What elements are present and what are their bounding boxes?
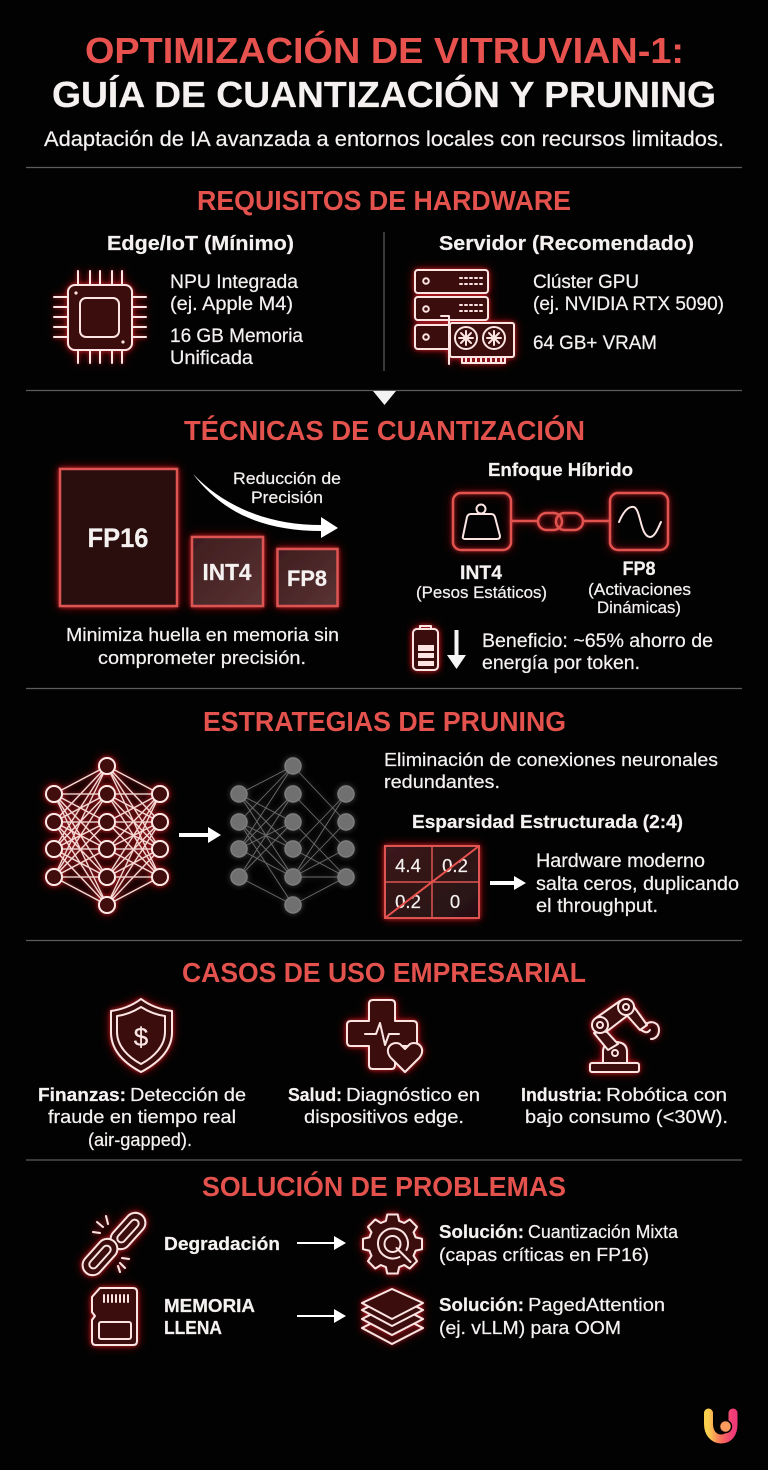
text: finanzas: Detección de (130, 1084, 246, 1105)
text: server specs: (ej. NVIDIA RTX 5090) (533, 294, 724, 315)
text: edge specs: NPU Integrada (170, 272, 298, 293)
label: memoria llena: LLENA (164, 1317, 222, 1338)
text: edge specs: (ej. Apple M4) (170, 294, 293, 315)
icon: health (347, 1000, 422, 1072)
heading: requisitos de hardware: REQUISITOS DE HARDWARE (197, 185, 571, 216)
panel: estrategias de pruning (46, 706, 739, 918)
text: finanzas: fraude en tiempo real (48, 1106, 236, 1127)
panel: solucion de problemas (79, 1171, 679, 1345)
text: server specs: Clúster GPU (533, 272, 639, 293)
panel: requisitos de hardware (54, 185, 724, 371)
icon: weight (463, 504, 500, 539)
arrow: precision reduction (193, 474, 338, 538)
chart: sparsity grid: 0.2 (442, 855, 468, 876)
heading: tecnicas: TÉCNICAS DE CUANTIZACIÓN (184, 415, 585, 446)
icon: shield (111, 999, 172, 1072)
diagram: hybrid link (453, 493, 668, 550)
label: fp8 (588, 558, 691, 617)
label: degradacion: Degradación (164, 1233, 280, 1254)
text: salud (288, 1084, 480, 1127)
arrow: degradacion (297, 1236, 346, 1250)
icon: server and gpu (415, 270, 514, 364)
chart: sparsity grid: 0 (450, 891, 460, 912)
icon: logo (708, 1413, 733, 1439)
label: fp8: (Activaciones (588, 581, 691, 599)
text: industria (521, 1084, 728, 1127)
text: memory footprint: comprometer precisión. (98, 647, 306, 668)
heading: casos de uso: CASOS DE USO EMPRESARIAL (182, 957, 586, 988)
panel: tecnicas de cuantizacion (60, 415, 713, 674)
text: solucion mixta: (capas críticas en FP16) (439, 1245, 649, 1265)
chart: sparsity grid (385, 846, 479, 918)
block: INT4: INT4 (202, 559, 252, 585)
text: finanzas: Finanzas: (38, 1084, 126, 1105)
heading: solucion: SOLUCIÓN DE PROBLEMAS (202, 1171, 566, 1202)
text: salud: dispositivos edge. (304, 1106, 464, 1127)
label: reduccion de precision: Reducción de (233, 469, 341, 488)
text: memory footprint (66, 624, 339, 668)
text: solucion mixta: Solución: (439, 1222, 524, 1242)
subtitle: Adaptación de IA avanzada a entornos locales con recursos limitados. (44, 128, 724, 151)
block: FP8: FP8 (287, 566, 327, 591)
text: finanzas: (air-gapped). (88, 1129, 192, 1150)
text: benefit: energía por token. (482, 653, 640, 674)
text: server specs (533, 272, 724, 354)
icon: gear (363, 1214, 422, 1274)
text: salud: Diagnóstico en (346, 1084, 480, 1105)
icon: sd card (92, 1288, 137, 1345)
chart: sparsity grid: 0.2 (395, 891, 421, 912)
label: int4: (Pesos Estáticos) (416, 584, 547, 602)
chart: pruned network (231, 758, 354, 913)
arrow: sparsity (490, 876, 526, 890)
block: FP8 (278, 549, 338, 606)
icon: chip (54, 271, 146, 363)
heading: edge: Edge/IoT (Mínimo) (107, 233, 294, 255)
text: edge specs: 16 GB Memoria (170, 326, 303, 347)
title: GUÍA DE CUANTIZACIÓN Y PRUNING (52, 73, 716, 115)
text: industria: Industria: (521, 1084, 602, 1105)
text: benefit (482, 631, 713, 674)
icon: broken chain (79, 1209, 149, 1279)
block: FP16 (60, 469, 177, 606)
text: memory footprint: Minimiza huella en memoria sin (66, 624, 339, 645)
text: pruning description: redundantes. (384, 771, 500, 792)
arrow: pruned (179, 827, 221, 843)
text: solucion mixta: Cuantización Mixta (528, 1222, 679, 1242)
text: edge specs: Unificada (170, 348, 253, 369)
label: int4: INT4 (460, 562, 502, 584)
chart: full network (46, 758, 168, 913)
text: solucion paged attention: PagedAttention (528, 1295, 665, 1315)
heading: servidor: Servidor (Recomendado) (439, 233, 694, 255)
label: reduccion de precision: Precisión (251, 488, 323, 507)
icon: layers (362, 1289, 423, 1344)
arrow: section connector (373, 391, 396, 405)
icon: wave (619, 507, 661, 537)
icon: shield: $ (134, 1022, 149, 1052)
arrow: memoria (297, 1309, 346, 1323)
heading: estrategias: ESTRATEGIAS DE PRUNING (203, 706, 566, 737)
label: int4 (416, 562, 547, 602)
block: FP16: FP16 (88, 523, 148, 553)
heading: enfoque hibrido: Enfoque Híbrido (488, 459, 633, 480)
text: throughput: Hardware moderno (536, 851, 705, 872)
text: pruning description: Eliminación de conexiones neuronales (384, 749, 718, 770)
text: salud: Salud: (288, 1084, 342, 1105)
arrow: down (447, 630, 466, 669)
label: fp8: FP8 (622, 558, 656, 580)
title: OPTIMIZACIÓN DE VITRUVIAN-1: (85, 29, 684, 71)
text: throughput: salta ceros, duplicando (536, 874, 739, 895)
text: pruning description (384, 749, 718, 792)
label: reduccion de precision (233, 469, 341, 507)
text: solucion mixta (439, 1222, 679, 1265)
text: solucion paged attention (439, 1295, 665, 1338)
panel: casos de uso empresarial (38, 957, 728, 1150)
text: solucion paged attention: (ej. vLLM) para OOM (439, 1318, 621, 1338)
chart: sparsity grid: 4.4 (395, 855, 421, 876)
icon: battery (413, 626, 438, 670)
block: INT4 (192, 537, 263, 606)
text: industria: Robótica con (606, 1084, 727, 1105)
heading: esparsidad: Esparsidad Estructurada (2:4) (412, 812, 683, 832)
text: edge specs (170, 272, 303, 369)
text: finanzas (38, 1084, 246, 1150)
text: throughput: el throughput. (536, 896, 658, 917)
text: throughput (536, 851, 739, 917)
text: solucion paged attention: Solución: (439, 1295, 524, 1315)
text: server specs: 64 GB+ VRAM (533, 333, 657, 354)
text: industria: bajo consumo (<30W). (525, 1106, 728, 1127)
label: memoria llena (164, 1295, 255, 1338)
text: benefit: Beneficio: ~65% ahorro de (482, 631, 713, 652)
icon: robot arm (590, 999, 659, 1072)
label: memoria llena: MEMORIA (164, 1295, 255, 1316)
label: fp8: Dinámicas) (597, 599, 681, 617)
title (52, 29, 716, 115)
